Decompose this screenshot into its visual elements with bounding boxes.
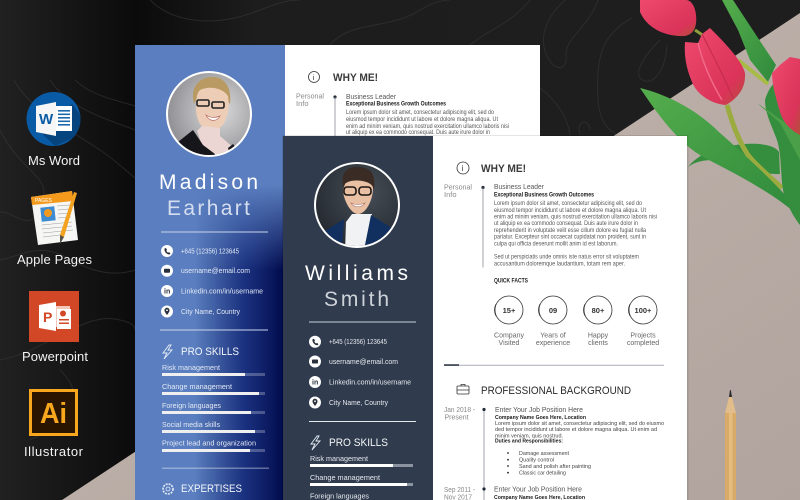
fact: years of experience: experience xyxy=(536,340,570,347)
job entry 1: Jan 2018 - xyxy=(444,407,476,414)
contact: phone: +645 (12356) 123645 xyxy=(329,337,387,346)
back leaf xyxy=(688,144,780,174)
skill bars xyxy=(162,363,265,452)
contact: email: username@email.com xyxy=(181,266,250,275)
badge: powerpoint: Powerpoint xyxy=(22,349,88,364)
badge: apple pages xyxy=(17,191,92,267)
right leaves xyxy=(765,80,800,225)
heading: pro skills xyxy=(311,436,388,450)
fact: company visited: 15+ xyxy=(503,306,516,315)
heading: expertises: EXPERTISES xyxy=(181,483,242,495)
contact: linkedin: in xyxy=(312,380,318,386)
job entry 1: Quality control xyxy=(519,458,554,464)
job entry 1: Damage assessment xyxy=(519,451,569,457)
badge: apple pages: Apple Pages xyxy=(17,252,92,267)
job entry 1: Present xyxy=(444,414,469,422)
job entry 1: Classic car detailing xyxy=(519,471,566,477)
portrait: man xyxy=(314,162,400,252)
fact: projects completed: 100+ xyxy=(635,306,652,315)
why me section: enim ad minim veniam, quis nostrud exercitation ullamco laboris nisi xyxy=(494,215,657,221)
quick facts: QUICK FACTS xyxy=(494,279,528,285)
front sheet shadow xyxy=(282,135,688,500)
job entry 1: Sand and polish after painting xyxy=(519,464,591,470)
heading: pro skills xyxy=(163,345,239,359)
back sheet: why me xyxy=(296,72,509,137)
contact: phone: +645 (12356) 123645 xyxy=(181,246,239,256)
why me section: culpa qui officia deserunt mollit anim id est laborum. xyxy=(494,241,618,247)
heading: pro skills: PRO SKILLS xyxy=(181,346,239,358)
quick facts xyxy=(494,279,659,347)
fact: happy clients: 80+ xyxy=(592,306,605,315)
job entry 1: Duties and Responsibilities: xyxy=(495,438,563,444)
badge: apple pages: PAGES xyxy=(35,198,53,204)
name xyxy=(305,262,408,311)
job entry 1: Enter Your Job Position Here xyxy=(495,407,583,414)
fact: years of experience: Years of xyxy=(540,332,566,340)
back sheet: why me: Info xyxy=(296,99,309,108)
job entry 1: Company Name Goes Here, Location xyxy=(495,415,586,421)
badge: illustrator xyxy=(24,390,84,459)
right pointed leaf xyxy=(757,103,800,160)
contact: linkedin: Linkedin.com/in/username xyxy=(181,286,263,296)
back resume sheet xyxy=(135,45,540,500)
dark sidebar xyxy=(283,136,433,500)
badge: powerpoint: P xyxy=(43,309,52,325)
portrait: woman xyxy=(165,70,255,160)
skill: foreign languages: Foreign languages xyxy=(162,401,221,410)
fact: company visited xyxy=(494,296,524,347)
contact list xyxy=(309,336,411,408)
centre tulip bud xyxy=(685,28,745,105)
skill: social media: Social media skills xyxy=(162,420,220,429)
contact list xyxy=(161,245,263,318)
badge: powerpoint xyxy=(22,291,88,364)
contact: linkedin xyxy=(309,376,411,388)
navy gradient overlay xyxy=(200,191,283,500)
why me section: eiusmod tempor incididunt ut labore et dolore magna aliqua. Ut xyxy=(494,208,646,214)
skill: risk management: Risk management xyxy=(310,454,369,463)
fact: projects completed: Projects xyxy=(630,332,656,340)
top tulip bud xyxy=(640,0,696,36)
why me section: Business Leader xyxy=(494,182,544,191)
back sheet: why me: Exceptional Business Growth Outcomes xyxy=(346,102,447,108)
professional background section xyxy=(444,384,664,500)
contact: linkedin: Linkedin.com/in/username xyxy=(329,378,411,386)
badge: ms word xyxy=(26,92,80,168)
contact: email: username@email.com xyxy=(329,357,398,366)
back sheet: why me: eiusmod tempor incididunt ut labore et dolore magna aliqua. Ut xyxy=(346,117,498,123)
big leaf xyxy=(640,88,793,211)
contact: location: City Name, Country xyxy=(181,307,240,316)
why me section: accusantium doloremque laudantium, totam rem aper. xyxy=(494,261,625,267)
contact: linkedin: in xyxy=(164,288,170,296)
fact: happy clients xyxy=(584,296,612,347)
fact: company visited: Company xyxy=(494,332,524,340)
stem: top bud xyxy=(695,30,704,36)
front resume sheet xyxy=(282,135,688,500)
skill bars xyxy=(310,454,413,500)
fact: years of experience xyxy=(536,296,570,347)
job entry 1: Lorem ipsum dolor sit amet, consectetur adipiscing elit, sed do eiusmo xyxy=(495,421,664,427)
fact: projects completed xyxy=(627,296,659,347)
why me section: Exceptional Business Growth Outcomes xyxy=(494,192,595,198)
name xyxy=(159,171,258,220)
back sheet: why me: Business Leader xyxy=(346,92,396,101)
badge: illustrator: Ai xyxy=(40,398,67,430)
why me section: reprehenderit in voluptate velit esse cillum dolore eu fugiat nulla xyxy=(494,228,647,234)
back sheet: why me: Personal xyxy=(296,92,324,100)
heading: pro skills: PRO SKILLS xyxy=(329,437,388,449)
why me section: Lorem ipsum dolor sit amet, consectetur adipiscing elit, sed do xyxy=(494,201,643,207)
professional background section: PROFESSIONAL BACKGROUND xyxy=(481,385,631,397)
why me section: ut aliquip ex ea commodo consequat. Duis aute irure dolor in xyxy=(494,221,638,227)
tulips xyxy=(640,0,800,225)
job entry 1: ded tempor incididunt ut labore et dolore magna aliqua. Ut enim ad xyxy=(495,427,657,433)
back sheet: why me: Lorem ipsum dolor sit amet, consectetur adipiscing elit, sed do xyxy=(346,110,495,116)
why me section: i xyxy=(462,164,464,173)
fact: happy clients: clients xyxy=(588,340,608,347)
why me section: Info xyxy=(444,190,457,199)
right tulip bud xyxy=(772,57,800,135)
main stem xyxy=(727,105,782,188)
skill: change management: Change management xyxy=(310,473,381,482)
skill: change management: Change management xyxy=(162,382,233,391)
job entry 2 xyxy=(444,486,585,500)
software badges xyxy=(17,92,92,459)
badge: ms word: W xyxy=(39,111,54,128)
back sheet: why me: WHY ME! xyxy=(333,72,378,84)
name: Madison xyxy=(159,171,258,194)
blue sidebar xyxy=(135,45,285,500)
skill: project lead: Project lead and organization xyxy=(162,438,256,448)
fact: happy clients: Happy xyxy=(588,332,609,340)
why me section: Sed ut perspiciatis unde omnis iste natus error sit voluptatem xyxy=(494,255,639,261)
why me section: WHY ME! xyxy=(481,163,526,175)
icon: briefcase xyxy=(457,384,469,394)
job entry 2: Enter Your Job Position Here xyxy=(494,486,582,494)
why me section: pariatur. Excepteur sint occaecat cupidatat non proident, sunt in xyxy=(494,235,646,241)
fact: company visited: Visited xyxy=(499,340,520,347)
background contour lines xyxy=(0,0,667,440)
why me section: Personal xyxy=(444,182,472,192)
badge: illustrator: Illustrator xyxy=(24,444,84,459)
back sheet: why me: enim ad minim veniam, quis nostrud exercitation ullamco laboris nisi xyxy=(346,124,509,130)
top leaf xyxy=(722,0,776,82)
fact: years of experience: 09 xyxy=(549,306,557,315)
white area xyxy=(285,45,540,140)
back sheet: why me: ut aliquip ex ea commodo consequat. Duis aute irure dolor in xyxy=(346,130,490,136)
contact: linkedin xyxy=(161,285,263,297)
name: Earhart xyxy=(167,197,250,220)
name: Smith xyxy=(324,288,389,311)
pencil xyxy=(725,390,736,500)
contact: location: City Name, Country xyxy=(329,398,388,407)
badge: ms word: Ms Word xyxy=(28,153,80,168)
job entry 1: minim veniam, quis nostrud. xyxy=(495,434,563,440)
back sheet: why me: i xyxy=(313,73,315,82)
fact: projects completed: completed xyxy=(627,340,659,347)
name: Williams xyxy=(305,262,408,285)
job entry 2: Sep 2011 - xyxy=(444,487,476,494)
stem: upper xyxy=(738,60,768,84)
job entry 1 xyxy=(444,407,664,477)
skill: risk management: Risk management xyxy=(162,363,221,372)
why me section xyxy=(444,162,657,268)
white main column xyxy=(433,136,687,500)
